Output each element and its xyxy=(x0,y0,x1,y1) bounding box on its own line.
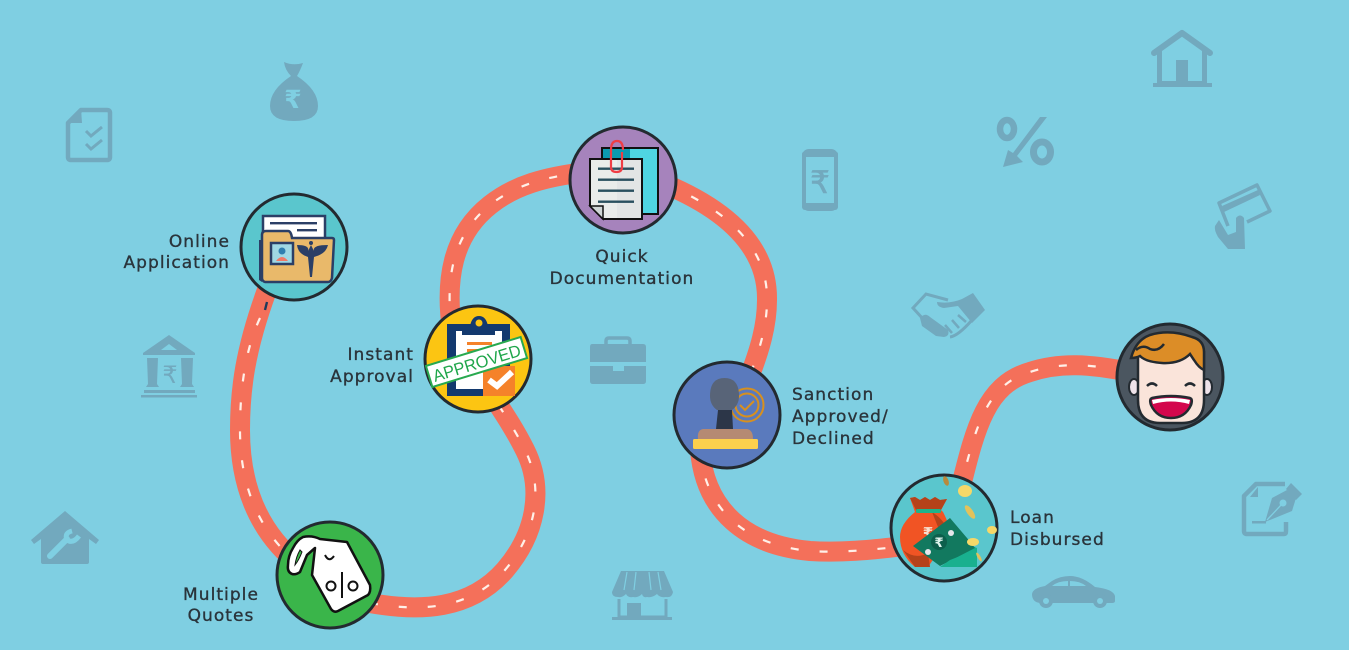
step 4 label: Sanction Approved/Declined xyxy=(792,385,889,449)
step 5: loan disbursed icon: ₹ xyxy=(923,524,933,542)
icon: phone with rupee: ₹ xyxy=(810,165,830,201)
icon: document with pen nib xyxy=(1244,483,1302,534)
step 1 label: Online Application xyxy=(123,232,230,273)
step 5: loan disbursed icon xyxy=(891,475,997,581)
step 5 label: Loan Disbursed xyxy=(1010,508,1105,550)
icon: house xyxy=(1153,33,1212,87)
step 4 label: Sanction Approved/Declined: Sanction xyxy=(792,385,874,405)
step 6 label: Multiple Quotes: Quotes xyxy=(188,606,254,626)
step 3 label: Quick Documentation xyxy=(550,247,694,289)
icon: hand holding card xyxy=(1215,185,1270,249)
icon: rupee money bag xyxy=(270,62,318,121)
step 1 label: Online Application: Application xyxy=(123,253,230,273)
step 5 label: Loan Disbursed: Loan xyxy=(1010,508,1055,528)
step 3 label: Quick Documentation: Documentation xyxy=(550,269,694,289)
step 5: loan disbursed icon: ₹ xyxy=(934,536,944,551)
icon: briefcase xyxy=(590,338,646,384)
step 1: online application icon xyxy=(241,194,347,300)
icon: phone with rupee xyxy=(802,151,838,210)
step 3 label: Quick Documentation: Quick xyxy=(595,247,649,267)
icon: checklist document xyxy=(66,108,110,160)
step 6 label: Multiple Quotes xyxy=(183,585,259,626)
step 5 label: Loan Disbursed: Disbursed xyxy=(1010,530,1105,550)
step 2 label: Instant Approval xyxy=(330,345,414,387)
step 2 label: Instant Approval: Instant xyxy=(347,345,414,365)
icon: bank building: ₹ xyxy=(162,361,178,389)
step 6 label: Multiple Quotes: Multiple xyxy=(183,585,259,605)
step 2: instant approval icon xyxy=(425,306,531,412)
step 2: instant approval icon: APPROVED xyxy=(431,341,523,386)
road: winding path xyxy=(240,172,1130,607)
icon: handshake xyxy=(913,293,985,337)
step 6: multiple quotes icon xyxy=(277,522,383,628)
step 4 label: Sanction Approved/Declined: Approved/ xyxy=(792,407,889,427)
icon: rupee money bag: ₹ xyxy=(284,85,302,114)
step 4 label: Sanction Approved/Declined: Declined xyxy=(792,429,875,449)
icon: bank building xyxy=(141,335,197,398)
step 2 label: Instant Approval: Approval xyxy=(330,367,414,387)
icon: house with wrench xyxy=(31,511,99,564)
step 3: quick documentation icon xyxy=(570,127,676,233)
icon: percent with down arrow xyxy=(1000,117,1050,167)
end point: happy customer face xyxy=(1117,324,1223,430)
step 1 label: Online Application: Online xyxy=(169,232,230,252)
icon: shop awning xyxy=(612,571,673,620)
icon: car xyxy=(1032,576,1115,608)
step 4: sanction stamp icon xyxy=(674,362,780,468)
